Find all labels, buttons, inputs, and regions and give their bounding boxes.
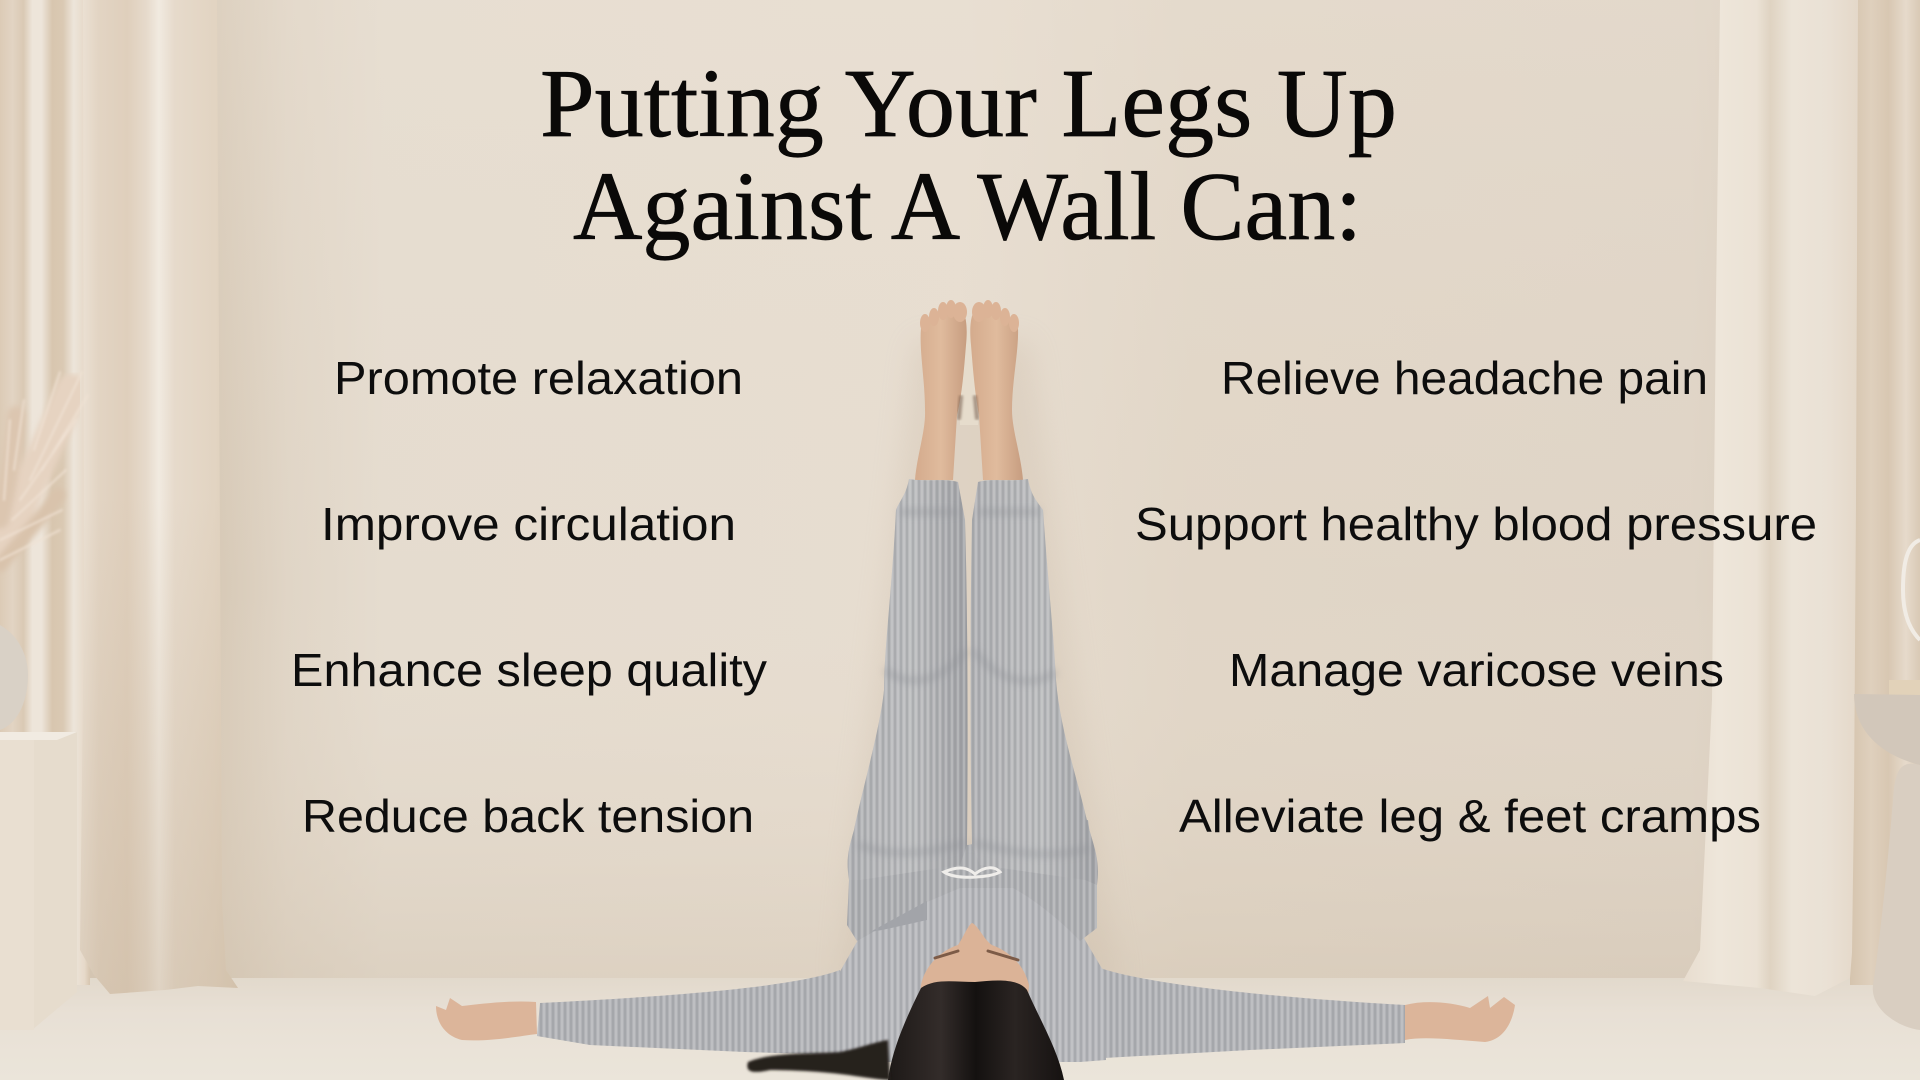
torso bbox=[838, 875, 1106, 1062]
benefit 8: Alleviate leg & feet cramps bbox=[1179, 790, 1761, 842]
title bbox=[540, 50, 1397, 260]
ponytail bbox=[747, 1040, 890, 1080]
front curtain bbox=[1683, 0, 1858, 996]
benefit 6: Support healthy blood pressure bbox=[1135, 498, 1817, 550]
right trouser leg bbox=[970, 479, 1098, 885]
right sleeve bbox=[1100, 968, 1405, 1058]
face bbox=[918, 923, 1029, 1010]
person with legs up the wall bbox=[436, 300, 1515, 1080]
left curtains bbox=[0, 0, 238, 994]
back curtain bbox=[0, 0, 90, 985]
toes bbox=[920, 300, 1019, 332]
benefit 5: Relieve headache pain bbox=[1221, 352, 1708, 404]
benefit 4: Reduce back tension bbox=[302, 790, 754, 842]
right hand bbox=[1405, 996, 1515, 1042]
arms bbox=[436, 968, 1515, 1058]
book bbox=[1889, 680, 1920, 695]
left trouser leg bbox=[848, 479, 968, 880]
inner seam bbox=[966, 500, 970, 845]
left leg skin bbox=[915, 306, 967, 480]
front curtain bbox=[80, 0, 238, 994]
hair bbox=[888, 980, 1064, 1080]
side table with ring and book bbox=[1854, 540, 1920, 1030]
eyes bbox=[935, 951, 1018, 960]
plinth box bbox=[0, 732, 77, 1030]
right curtains bbox=[1683, 0, 1920, 996]
ankle shadows bbox=[959, 397, 977, 418]
benefit 3: Enhance sleep quality bbox=[291, 644, 767, 696]
benefit 2: Improve circulation bbox=[321, 498, 736, 550]
benefit 1: Promote relaxation bbox=[334, 352, 743, 404]
left hand bbox=[436, 998, 537, 1040]
title: Putting Your Legs Up bbox=[540, 50, 1397, 157]
knee folds and cuffs bbox=[858, 512, 1090, 854]
right leg skin bbox=[970, 306, 1023, 480]
hips and trouser waist bbox=[847, 820, 1097, 941]
feet and calves bbox=[915, 300, 1023, 480]
ring handle bbox=[1903, 540, 1920, 640]
gap between feet bbox=[960, 330, 978, 425]
benefit 7: Manage varicose veins bbox=[1229, 644, 1724, 696]
floor bbox=[0, 978, 1920, 1080]
benefits left column bbox=[291, 352, 767, 842]
left sleeve bbox=[537, 970, 842, 1055]
title: Against A Wall Can: bbox=[573, 153, 1362, 260]
back curtain bbox=[1850, 0, 1920, 985]
benefits right column bbox=[1135, 352, 1817, 842]
pocket fold bbox=[870, 901, 927, 932]
pampas grass bbox=[0, 372, 88, 565]
table bbox=[1854, 694, 1920, 765]
wall shadow around the figure bbox=[840, 340, 1120, 985]
vase bbox=[0, 625, 28, 730]
drawstring bbox=[944, 868, 1000, 877]
